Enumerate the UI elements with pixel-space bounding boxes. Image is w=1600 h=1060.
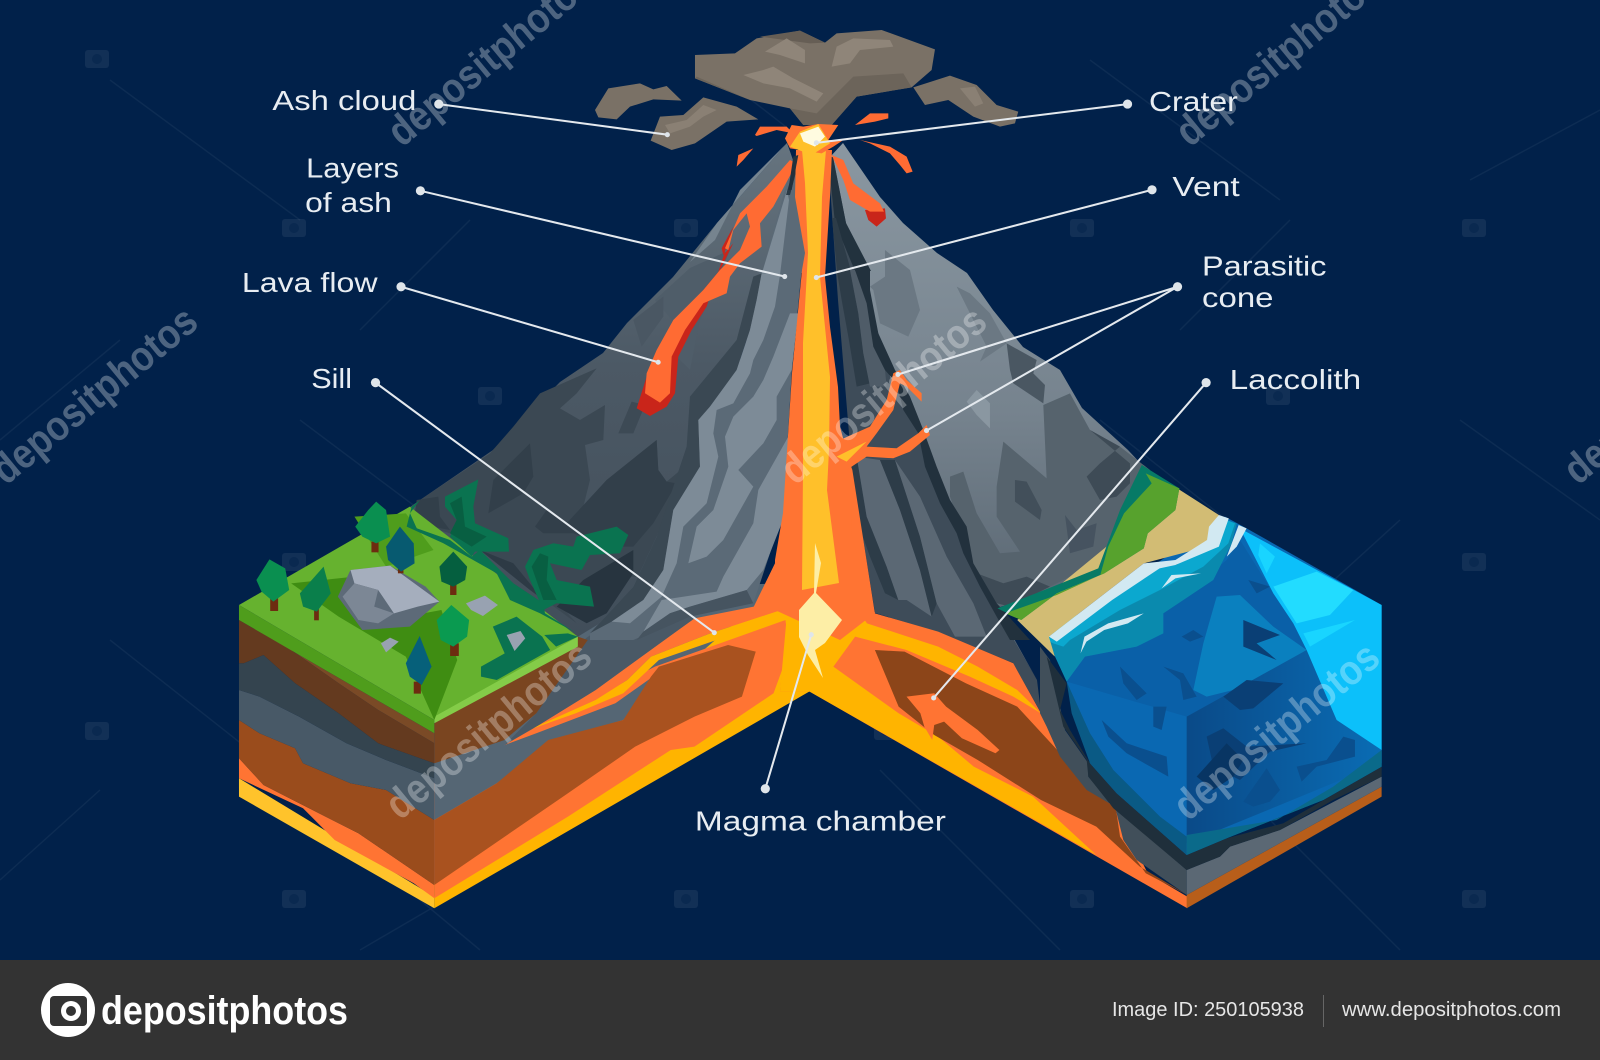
light stripes xyxy=(612,273,780,623)
lava splashes xyxy=(737,113,913,173)
sea: bright shallows xyxy=(1240,528,1382,750)
left block: lower strata left face xyxy=(239,620,434,908)
image id: Image ID: 250105938 xyxy=(1112,999,1304,1021)
label: Magma chamber: Magma chamber xyxy=(695,806,946,837)
left grass block xyxy=(239,507,578,733)
sea base xyxy=(1047,517,1382,855)
left slope facets xyxy=(413,297,700,623)
sea: right front face xyxy=(1187,650,1382,843)
label: Ash cloud: Ash cloud xyxy=(272,85,416,116)
sea: top surface xyxy=(1067,540,1307,717)
seabed: orange layer xyxy=(1187,787,1382,908)
sea: lower dark bands xyxy=(1067,682,1187,855)
label: Crater: Crater xyxy=(1149,86,1238,117)
coast: green, sand and foam xyxy=(997,465,1247,657)
left block: cross-section, sill and magma layers xyxy=(434,450,813,908)
lava flow right top xyxy=(832,155,884,212)
upper crack xyxy=(828,157,871,271)
label: Layers of ash xyxy=(305,153,399,218)
label: Layers of ash: Layers xyxy=(306,153,399,184)
volcano cut face upper left xyxy=(762,157,806,275)
label: Vent: Vent xyxy=(1172,171,1240,202)
label: Laccolith: Laccolith xyxy=(1230,364,1361,395)
volcano cut face right xyxy=(828,157,1041,713)
lava flow left xyxy=(645,160,797,403)
forest patch lower xyxy=(481,617,550,680)
sea: deep patches xyxy=(1102,580,1355,807)
grass details: rocks, patches and trees xyxy=(256,502,578,694)
labels and leader lines xyxy=(242,85,1361,837)
seabed: dark lines xyxy=(1047,657,1382,870)
watermark text xyxy=(0,0,1600,829)
left cut channel xyxy=(590,273,762,633)
rocks: small xyxy=(381,596,525,652)
parasitic vents xyxy=(837,370,930,470)
volcano right outer slope xyxy=(830,143,1152,680)
magma chamber xyxy=(799,543,842,678)
right cut stripes xyxy=(837,270,1030,640)
watermark text: depositphotos xyxy=(376,631,600,828)
label: Layers of ash: of ash xyxy=(305,187,392,218)
crater burst xyxy=(785,124,843,190)
seabed: grey side xyxy=(1040,647,1187,895)
leader lines xyxy=(376,104,1206,789)
volcano cut face left xyxy=(590,270,802,640)
forest patches on slope xyxy=(407,479,628,633)
footer logo icon xyxy=(41,983,95,1037)
right block: section strata xyxy=(780,450,1187,908)
footer bar xyxy=(0,960,1600,1060)
lava flow right shadow xyxy=(865,208,886,227)
trees xyxy=(256,502,469,694)
label: Parasitic cone: Parasitic xyxy=(1202,251,1327,282)
sea block xyxy=(1040,517,1382,908)
ash cloud xyxy=(595,30,1018,150)
magma vent xyxy=(775,150,875,640)
footer logo text: depositphotos xyxy=(101,989,348,1033)
website: www.depositphotos.com xyxy=(1341,999,1561,1021)
grass: darker folds xyxy=(291,577,457,720)
volcano left outer slope xyxy=(410,143,793,637)
leader dots xyxy=(371,99,1211,793)
label: Parasitic cone: cone xyxy=(1202,282,1273,313)
divider xyxy=(1323,995,1324,1027)
watermark text: depositphotos xyxy=(771,296,995,493)
label: Lava flow: Lava flow xyxy=(242,267,378,298)
seabed: grey front xyxy=(1187,777,1382,895)
lava and crater xyxy=(637,113,930,470)
label: Sill: Sill xyxy=(311,363,352,394)
watermark text: depositphotos xyxy=(1164,632,1388,829)
lava flow left: shadow xyxy=(637,227,733,416)
label: Parasitic cone xyxy=(1202,251,1327,313)
sea: teal coast water xyxy=(1047,520,1237,682)
rock: large boulder xyxy=(338,566,439,630)
right slope facets xyxy=(870,250,1150,607)
